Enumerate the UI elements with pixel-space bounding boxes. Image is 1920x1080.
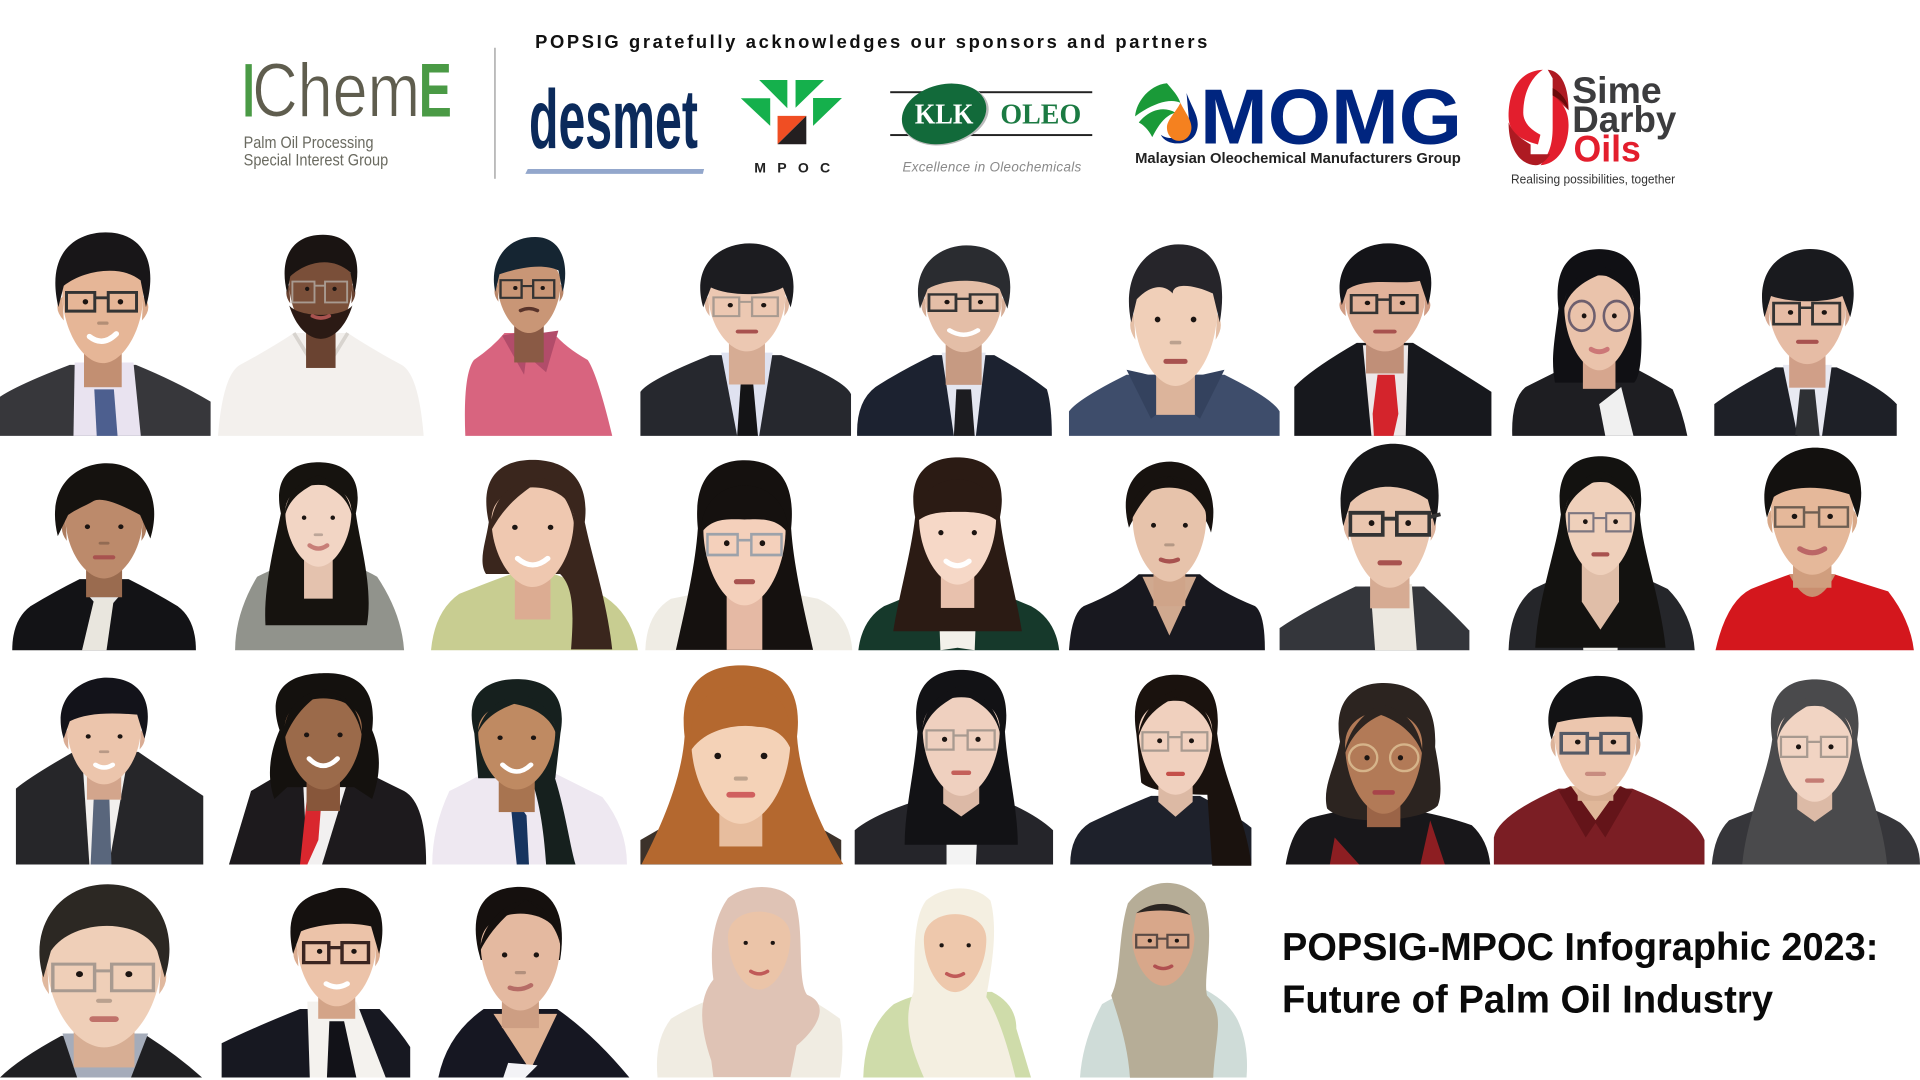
portrait 24 bbox=[1070, 675, 1251, 866]
portrait 30 bbox=[438, 887, 629, 1078]
portrait 3 bbox=[465, 237, 612, 436]
portrait 31 bbox=[657, 887, 842, 1078]
portrait 19 bbox=[16, 678, 203, 864]
portrait 32 bbox=[863, 888, 1031, 1078]
portrait 5 bbox=[857, 245, 1052, 436]
portrait 8 bbox=[1512, 249, 1687, 436]
portrait 23 bbox=[855, 670, 1053, 864]
portrait 12 bbox=[431, 460, 638, 650]
portrait 21 bbox=[432, 679, 627, 864]
logo: IChemE Palm Oil Processing SIG: I bbox=[242, 48, 255, 133]
portrait 29 bbox=[222, 888, 410, 1078]
portrait 6 bbox=[1069, 244, 1280, 436]
portrait 20 bbox=[229, 673, 426, 864]
portrait 4 bbox=[640, 243, 851, 436]
portrait 17 bbox=[1509, 456, 1695, 650]
portrait 9 bbox=[1714, 249, 1897, 436]
logo: MPOC bbox=[741, 80, 842, 176]
logo: MOMG: MOMG bbox=[1200, 72, 1462, 160]
logo: IChemE Palm Oil Processing SIG: Special Interest Group bbox=[244, 150, 388, 169]
logo: KLK OLEO: Excellence in Oleochemicals bbox=[902, 159, 1081, 174]
portrait 14 bbox=[858, 457, 1059, 650]
portrait 22 bbox=[640, 665, 843, 864]
logo: IChemE Palm Oil Processing SIG bbox=[242, 48, 452, 169]
logo: KLK OLEO: OLEO bbox=[1000, 100, 1081, 131]
portrait 11 bbox=[235, 462, 404, 650]
portrait row 4 bbox=[0, 883, 1247, 1078]
logo: Sime Darby Oils: Realising possibilities, together bbox=[1511, 172, 1676, 187]
portrait 7 bbox=[1294, 243, 1491, 436]
logo: desmet bbox=[525, 73, 704, 174]
portrait 28 bbox=[0, 884, 202, 1078]
logo: Sime Darby Oils: Sime bbox=[1572, 70, 1662, 111]
portrait 10 bbox=[12, 463, 196, 650]
logo: Sime Darby Oils: Darby bbox=[1572, 99, 1677, 140]
portrait 25 bbox=[1286, 683, 1490, 864]
title: POPSIG-MPOC Infographic 2023: bbox=[1282, 926, 1878, 969]
portrait row 1 bbox=[0, 232, 1897, 436]
title: Future of Palm Oil Industry bbox=[1282, 979, 1773, 1022]
portrait 18 bbox=[1716, 448, 1914, 650]
portrait row 2 bbox=[12, 444, 1914, 650]
portrait 27 bbox=[1712, 679, 1920, 864]
portrait 16 bbox=[1280, 444, 1469, 650]
portrait 33 bbox=[1080, 883, 1247, 1078]
portrait 1 bbox=[0, 232, 211, 436]
logo: MPOC: MPOC bbox=[754, 160, 830, 176]
portrait 13 bbox=[645, 460, 852, 650]
logo: IChemE Palm Oil Processing SIG: Chem bbox=[252, 48, 420, 133]
portrait 2 bbox=[218, 235, 424, 436]
logo: MOMG: Malaysian Oleochemical Manufacturers Group bbox=[1135, 151, 1461, 167]
sponsors heading: POPSIG gratefully acknowledges our sponsors and partners bbox=[535, 31, 1207, 52]
logo: desmet: desmet bbox=[529, 73, 698, 166]
portrait 26 bbox=[1494, 676, 1704, 864]
logo: KLK OLEO bbox=[890, 75, 1092, 174]
portrait 15 bbox=[1069, 462, 1265, 650]
logo: Sime Darby Oils: Oils bbox=[1573, 129, 1641, 170]
logo: KLK OLEO: KLK bbox=[915, 100, 974, 131]
logo: IChemE Palm Oil Processing SIG: Palm Oil Processing bbox=[244, 133, 373, 152]
portrait row 3 bbox=[16, 665, 1920, 866]
logo: IChemE Palm Oil Processing SIG: E bbox=[419, 48, 452, 133]
logo: Sime Darby Oils bbox=[1509, 70, 1677, 187]
title bbox=[1282, 926, 1878, 1022]
